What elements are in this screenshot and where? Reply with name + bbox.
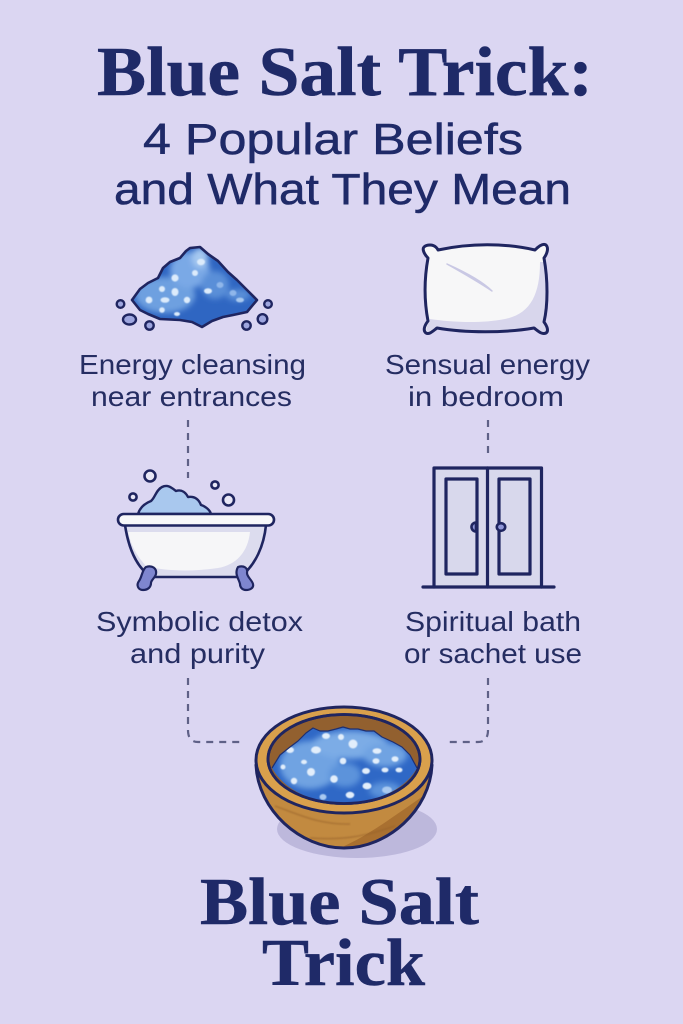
label: sensual energy bbox=[385, 349, 590, 412]
icon: blue salt pile bbox=[117, 247, 272, 330]
label: energy cleansing: Energy cleansing bbox=[79, 349, 306, 380]
label: energy cleansing bbox=[79, 349, 306, 412]
subtitle bbox=[114, 115, 571, 214]
icon: bathtub with foam bbox=[118, 470, 274, 590]
title: Blue Salt Trick: bbox=[97, 34, 593, 111]
bottom title: Blue Salt bbox=[200, 865, 480, 939]
label: spiritual bath bbox=[404, 606, 582, 669]
label: symbolic detox: and purity bbox=[130, 638, 265, 669]
label: sensual energy: in bedroom bbox=[408, 381, 564, 412]
connector: right lower dashed line bbox=[446, 678, 488, 742]
label: energy cleansing: near entrances bbox=[91, 381, 292, 412]
subtitle: 4 Popular Beliefs bbox=[143, 115, 523, 164]
label: spiritual bath: Spiritual bath bbox=[405, 606, 581, 637]
icon: wooden bowl of blue salt bbox=[256, 707, 437, 858]
label: symbolic detox bbox=[96, 606, 303, 669]
icon: pillow bbox=[423, 244, 547, 334]
connector: left upper dashed line bbox=[187, 420, 189, 478]
icon: double doors bbox=[423, 468, 554, 587]
label: sensual energy: Sensual energy bbox=[385, 349, 590, 380]
connector: left lower dashed line bbox=[188, 678, 242, 742]
label: spiritual bath: or sachet use bbox=[404, 638, 582, 669]
subtitle: and What They Mean bbox=[114, 165, 571, 214]
bottom title bbox=[200, 865, 480, 1000]
bottom title: Trick bbox=[262, 926, 426, 1000]
connector: right upper dashed line bbox=[487, 420, 489, 454]
label: symbolic detox: Symbolic detox bbox=[96, 606, 303, 637]
